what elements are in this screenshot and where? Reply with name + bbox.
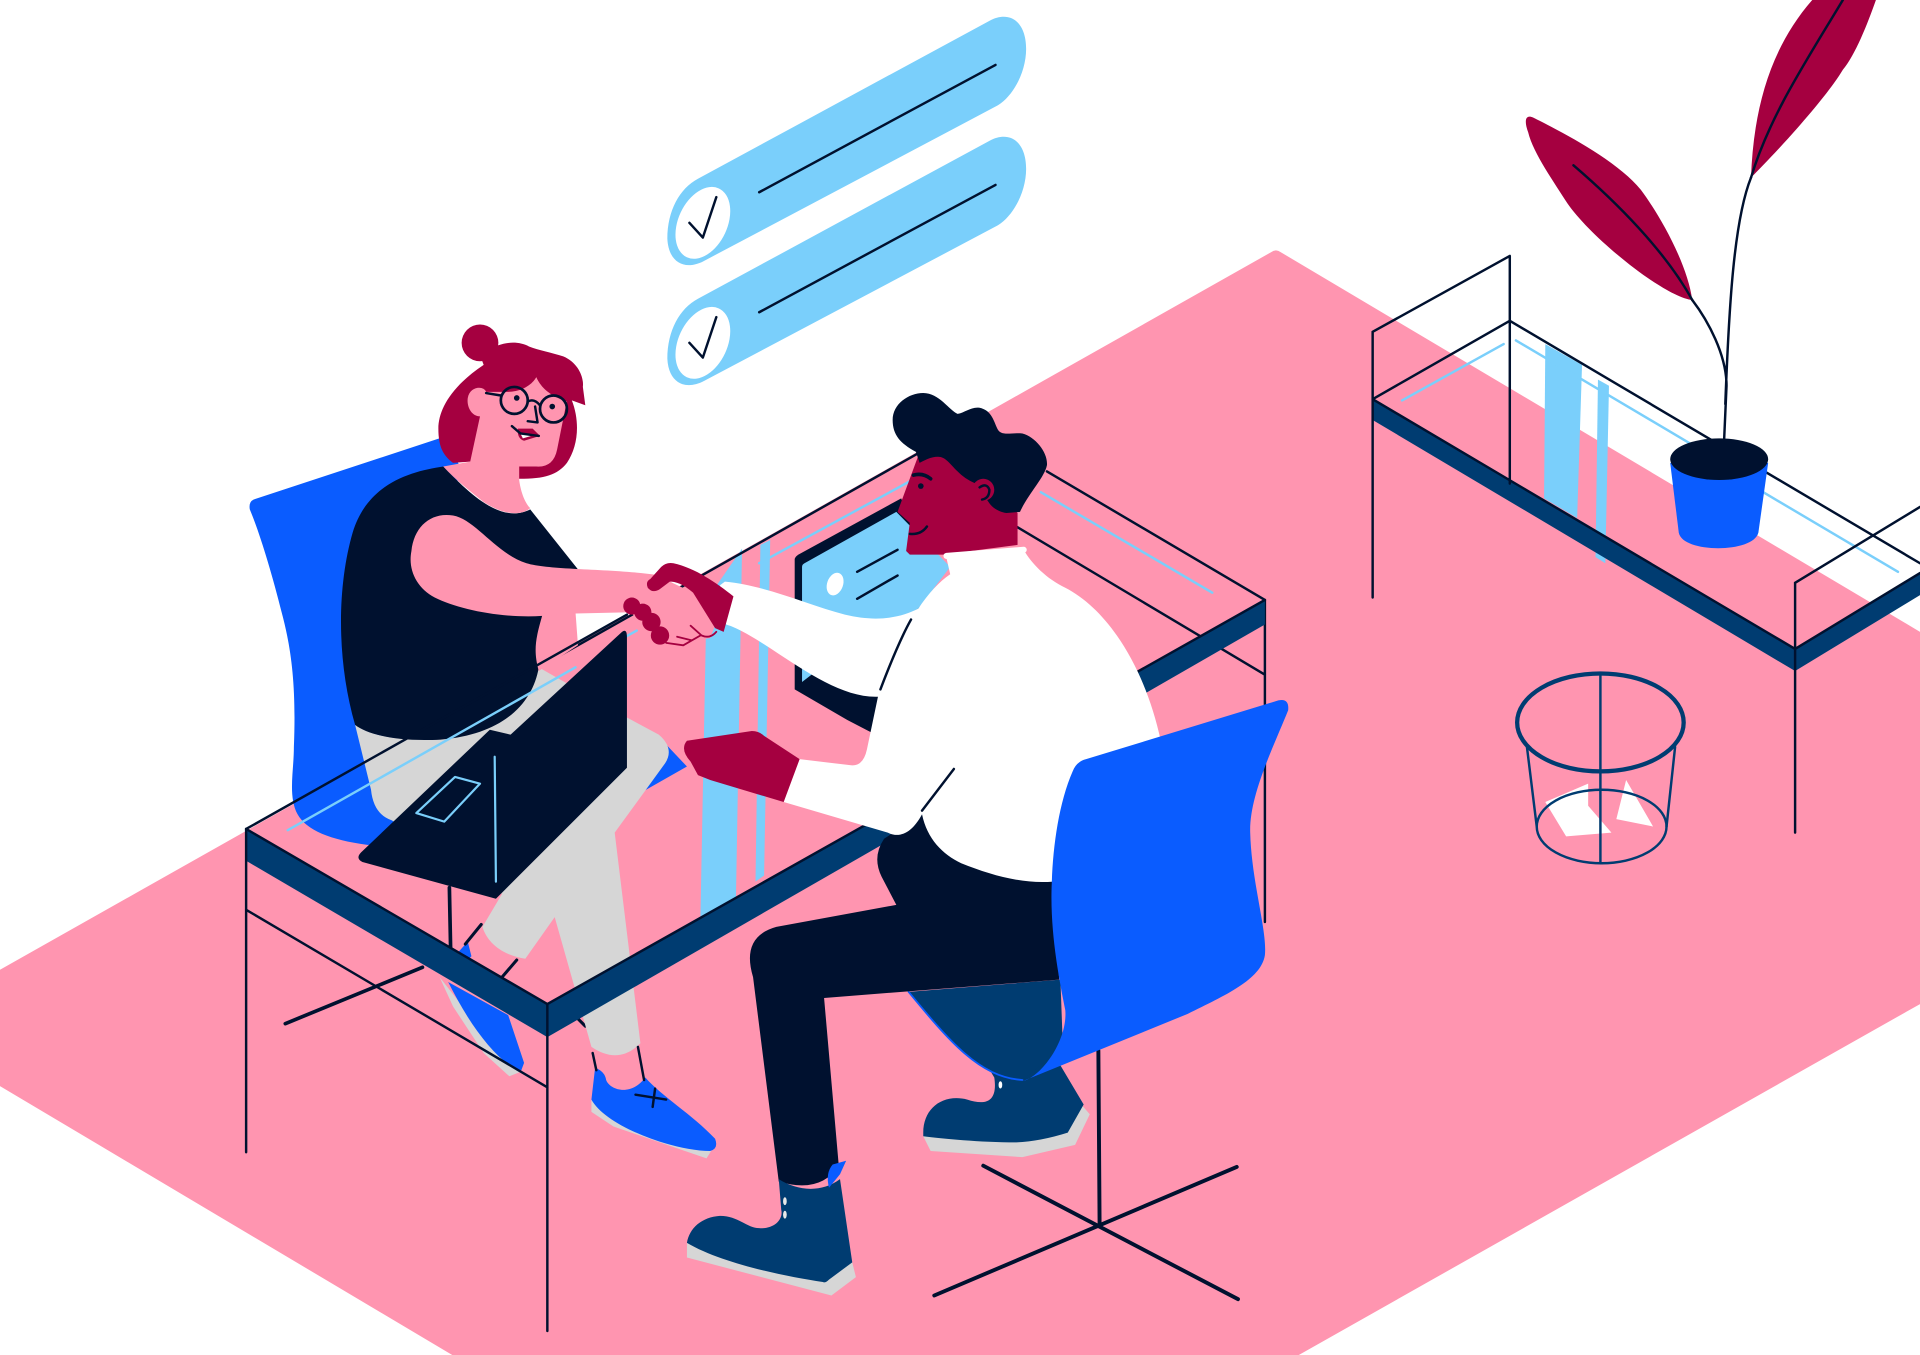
handshake <box>623 563 733 645</box>
woman's head <box>438 324 585 513</box>
panel: right desk <box>1373 256 1920 833</box>
panel: main desk front edge and legs <box>246 600 1265 1331</box>
icon: monitor <box>795 498 950 735</box>
panel: main desk back frame and reflections <box>539 452 1265 922</box>
icon: waste basket with paper <box>1517 673 1684 863</box>
man's trousers <box>750 814 1059 1185</box>
woman's torso <box>341 467 578 740</box>
man's head <box>893 393 1047 556</box>
icon: laptop <box>358 631 627 899</box>
woman's arm <box>411 515 716 643</box>
icon: potted plant <box>1526 0 1876 548</box>
desk surface lines <box>246 615 627 829</box>
man's far hand <box>684 731 800 802</box>
icon: checklist bars <box>665 17 1026 388</box>
woman's chair <box>250 436 687 1024</box>
man's chair <box>1022 700 1288 1081</box>
man's near boot <box>687 1161 856 1295</box>
chair base <box>934 1051 1238 1299</box>
man's shirt <box>720 550 1161 882</box>
woman's far shoe <box>440 924 585 1076</box>
woman's near shoe <box>591 1047 716 1158</box>
desk reflection line <box>288 631 637 830</box>
man's far boot <box>909 980 1090 1157</box>
woman's trousers <box>355 667 669 1055</box>
